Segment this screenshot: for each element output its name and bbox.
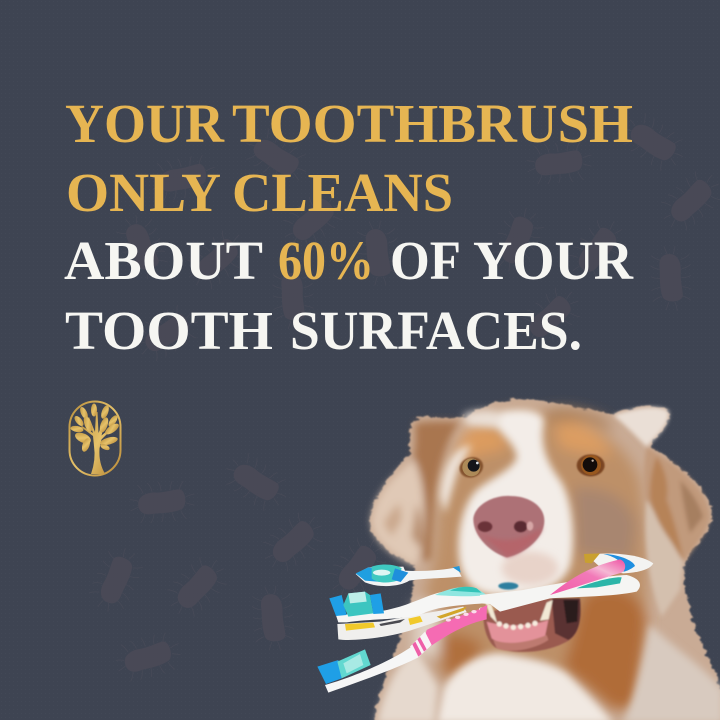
toothbrush: long white handle xyxy=(480,575,640,612)
toothbrush: pink tip xyxy=(480,605,487,621)
toothbrush: pink handle xyxy=(317,607,487,693)
title: ONLY xyxy=(66,162,221,223)
left ear xyxy=(372,421,460,567)
toothbrush: third handle xyxy=(337,607,467,640)
bacteria pattern xyxy=(84,107,720,685)
title: SURFACES. xyxy=(290,300,582,361)
toothbrush: top right xyxy=(584,553,653,573)
title: 60% xyxy=(278,230,374,291)
toothbrush: top left xyxy=(356,565,462,586)
icon: tree logo xyxy=(70,402,121,476)
mouth, lips and teeth xyxy=(483,582,581,652)
title: OF xyxy=(390,230,461,291)
toothbrush: pink right xyxy=(550,559,625,595)
title: ABOUT xyxy=(64,230,263,291)
chest xyxy=(437,653,613,720)
toothbrush: middle xyxy=(329,587,487,622)
face fur xyxy=(413,409,647,710)
toothbrush: teal accent xyxy=(577,577,622,588)
title: TOOTHBRUSH xyxy=(232,93,633,154)
title xyxy=(64,93,634,361)
left toothbrush group xyxy=(317,565,487,693)
under-nose pink tint xyxy=(502,552,558,585)
nose xyxy=(473,496,544,557)
right ear xyxy=(613,407,710,617)
title: YOUR xyxy=(65,93,225,154)
title: TOOTH xyxy=(65,300,273,361)
dog photo illustration xyxy=(317,399,720,720)
right toothbrush group xyxy=(480,553,653,621)
title: YOUR xyxy=(473,230,634,291)
white blaze and muzzle xyxy=(440,410,573,595)
title: CLEANS xyxy=(232,162,453,223)
dog silhouette xyxy=(370,399,720,720)
eyes xyxy=(457,454,605,481)
